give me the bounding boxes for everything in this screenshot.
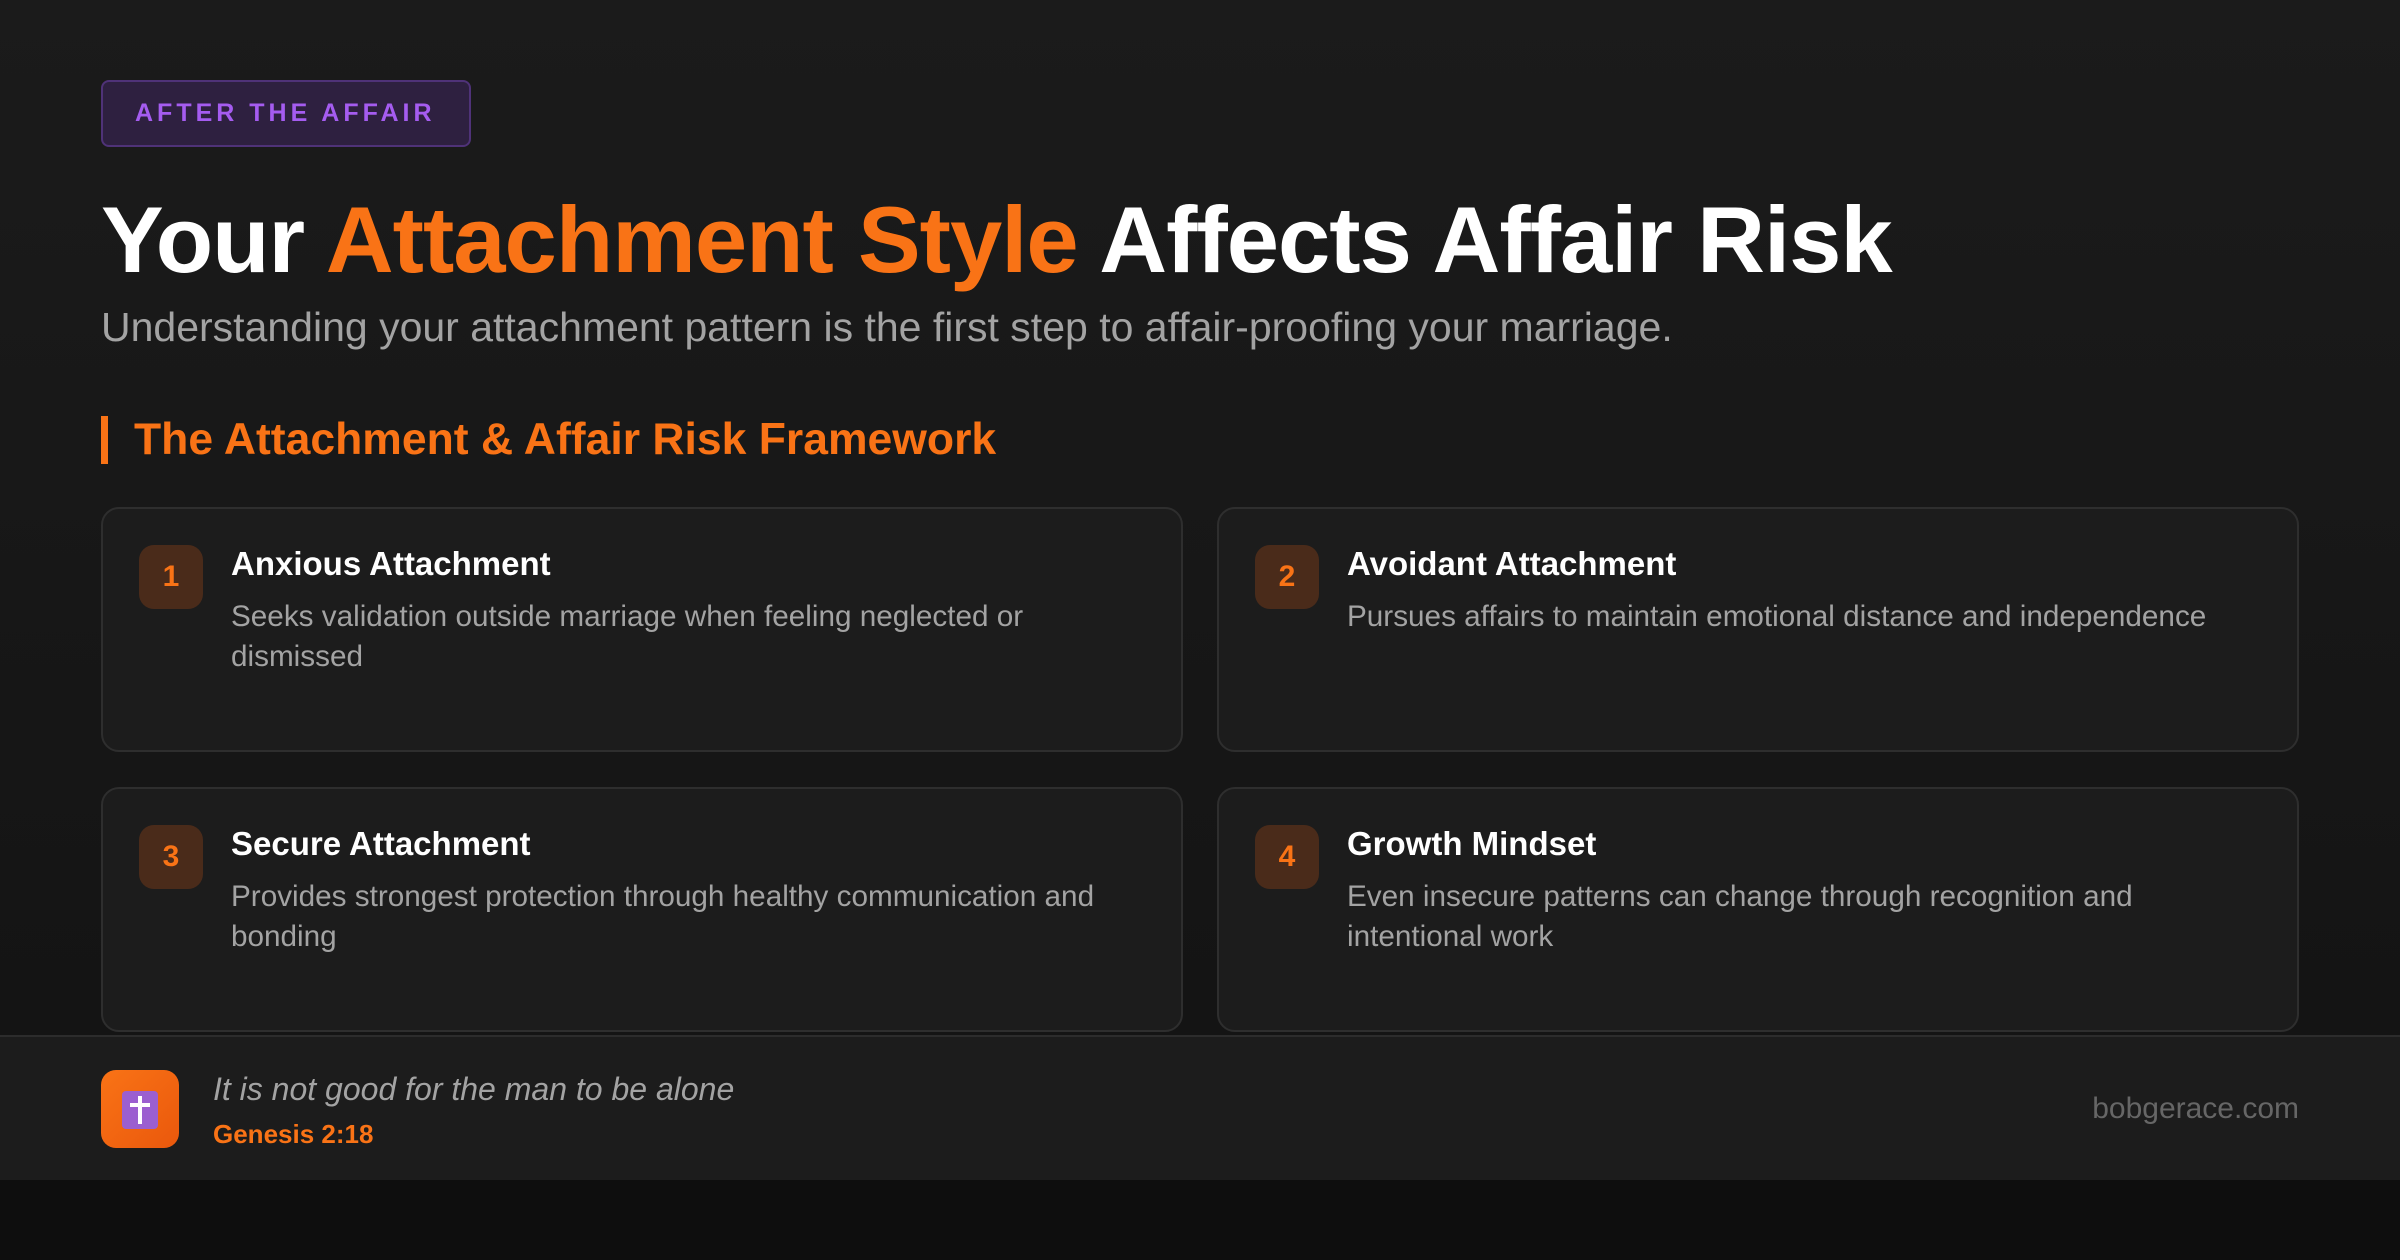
panel: growth mindset: [1217, 787, 2299, 1032]
panel: avoidant attachment: [1217, 507, 2299, 752]
badge: after the affair: AFTER THE AFFAIR: [135, 99, 436, 127]
number badge 1: 1: [163, 560, 179, 593]
title: Your Attachment Style Affects Affair Risk: [101, 187, 1892, 292]
website: bobgerace.com: [2092, 1092, 2299, 1125]
card title: Secure Attachment: [231, 825, 531, 862]
number badge 2: 2: [1279, 560, 1295, 593]
number badge 2: [1255, 545, 1319, 609]
card description: Even insecure patterns can change through recognition and intentional work: [1347, 880, 2133, 953]
subtitle: Understanding your attachment pattern is the first step to affair-proofing your marriage.: [101, 304, 1673, 350]
panel: secure attachment: [101, 787, 1183, 1032]
quote: It is not good for the man to be alone: [213, 1071, 734, 1107]
number badge 3: [139, 825, 203, 889]
card description: Pursues affairs to maintain emotional distance and independence: [1347, 600, 2206, 633]
icon: cross: [101, 1070, 179, 1148]
scripture reference: Genesis 2:18: [213, 1119, 373, 1149]
card title: Avoidant Attachment: [1347, 545, 1676, 582]
number badge 4: [1255, 825, 1319, 889]
card description: Provides strongest protection through healthy communication and bonding: [231, 880, 1094, 953]
number badge 4: 4: [1279, 840, 1295, 873]
section heading: The Attachment & Affair Risk Framework: [134, 415, 996, 464]
card description: Seeks validation outside marriage when feeling neglected or dismissed: [231, 600, 1023, 673]
card title: Anxious Attachment: [231, 545, 551, 582]
number badge 1: [139, 545, 203, 609]
footer: [0, 1035, 2400, 1180]
number badge 3: 3: [163, 840, 179, 873]
badge: after the affair: [101, 80, 471, 147]
panel: anxious attachment: [101, 507, 1183, 752]
card title: Growth Mindset: [1347, 825, 1596, 862]
